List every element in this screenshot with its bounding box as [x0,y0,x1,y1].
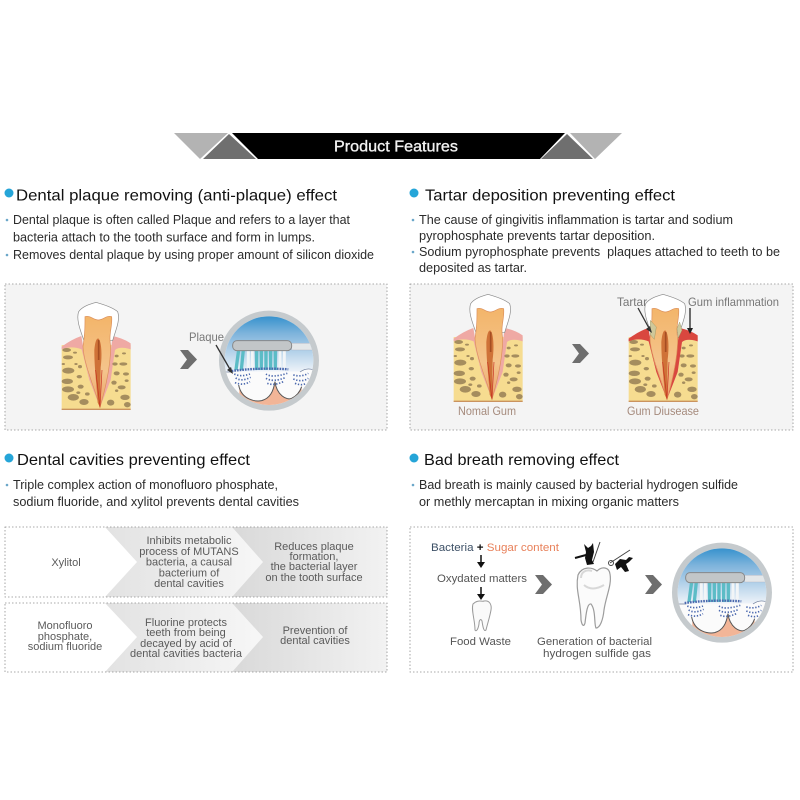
icon: normal gum tooth [454,294,523,402]
label: tartar with arrow [617,295,652,333]
label: plaque with arrow: Plaque [189,330,224,344]
section: dental plaque heading and text: Dental plaque is often called Plaque and refers to a layer that [13,213,351,227]
section: tartar heading and text: Tartar deposition preventing effect [425,188,676,204]
panel: xylitol flow row: Inhibits metabolic [146,535,232,547]
panel: xylitol flow row: Reduces plaque [274,541,354,553]
text: generation of gas: hydrogen sulfide gas [543,648,652,660]
section: dental plaque heading and text [4,188,374,262]
panel: bad breath process [410,527,793,672]
panel: monofluoro phosphate flow row [5,603,387,672]
section: dental cavities heading and text: Dental cavities preventing effect [17,452,251,469]
panel: xylitol flow row: Xylitol [51,557,81,569]
panel: monofluoro phosphate flow row: teeth from being [146,627,226,639]
label: plaque with arrow [189,330,233,374]
header banner: Product Features: Product Features [334,138,458,156]
text: oxydated matters: Oxydated matters [437,573,528,585]
panel: xylitol flow row: formation, [290,551,338,563]
icon: chevron arrow [180,350,197,369]
icon: healthy tooth [62,302,131,410]
panel: monofluoro phosphate flow row: dental cavities bacteria [130,648,243,660]
panel: plaque illustration [5,284,387,430]
icon: chevron arrow [645,575,662,594]
text: food waste: Food Waste [450,636,511,648]
panel: xylitol flow row: dental cavities [154,578,224,590]
panel: xylitol flow row: on the tooth surface [265,572,363,584]
section: dental cavities heading and text: sodium fluoride, and xylitol prevents dental cavities [13,495,299,509]
label: gum inflammation with arrow [687,295,779,334]
section: dental plaque heading and text: Removes dental plaque by using proper amount of silicon dioxide [13,248,374,262]
panel: monofluoro phosphate flow row: sodium fluoride [28,641,102,653]
icon: toothbrush cleaning teeth [672,543,773,644]
section: dental cavities heading and text [4,452,299,509]
header banner: Product Features [174,133,622,159]
icon: chevron arrow [535,575,552,594]
panel: xylitol flow row: bacteria, a causal [146,556,232,568]
panel: monofluoro phosphate flow row: Fluorine protects [145,617,227,629]
icon: down arrow [477,555,485,568]
section: bad breath heading and text: Bad breath removing effect [424,452,620,469]
panel: monofluoro phosphate flow row: Prevention of [283,625,348,637]
section: bad breath heading and text: or methly mercaptan in mixing organic matters [419,495,679,509]
label: normal gum: Nomal Gum [458,404,516,418]
text: bacteria plus sugar content: Bacteria + Sugar content [431,542,559,554]
section: tartar heading and text: pyrophosphate prevents tartar deposition. [419,229,655,243]
text: generation of gas: Generation of bacterial [537,636,652,648]
icon: tooth with bacteria [575,542,633,628]
panel: xylitol flow row: the bacterial layer [271,561,358,573]
section: tartar heading and text [410,188,780,275]
icon: small tooth [472,601,491,631]
section: bad breath heading and text [410,452,738,509]
icon: toothbrush cleaning teeth [219,311,320,412]
icon: diseased gum tooth [629,294,698,402]
panel: xylitol flow row [5,527,387,597]
section: tartar heading and text: The cause of gingivitis inflammation is tartar and sodium [419,213,733,227]
label: tartar with arrow: Tartar [617,295,647,309]
label: gum disease: Gum Diusease [627,404,699,418]
panel: xylitol flow row: process of MUTANS [139,546,239,558]
panel: xylitol flow row: bacterium of [159,568,220,580]
section: tartar heading and text: deposited as tartar. [419,261,527,275]
section: dental plaque heading and text: Dental plaque removing (anti-plaque) effect [16,188,338,204]
section: bad breath heading and text: Bad breath is mainly caused by bacterial hydrogen sulfide [419,478,738,492]
section: dental cavities heading and text: Triple complex action of monofluoro phosphate, [13,478,278,492]
section: dental plaque heading and text: bacteria attach to the tooth surface and form in lumps. [13,230,315,244]
icon: chevron arrow [572,344,589,363]
icon: down arrow [477,587,485,600]
panel: tartar illustration [410,284,793,430]
panel: monofluoro phosphate flow row: Monofluoro [37,620,93,632]
section: tartar heading and text: Sodium pyrophosphate prevents plaques attached to teeth to be [419,245,780,259]
panel: monofluoro phosphate flow row: decayed by acid of [140,638,233,650]
label: gum inflammation with arrow: Gum inflammation [688,295,779,309]
panel: monofluoro phosphate flow row: phosphate, [38,631,92,643]
panel: monofluoro phosphate flow row: dental cavities [280,635,350,647]
